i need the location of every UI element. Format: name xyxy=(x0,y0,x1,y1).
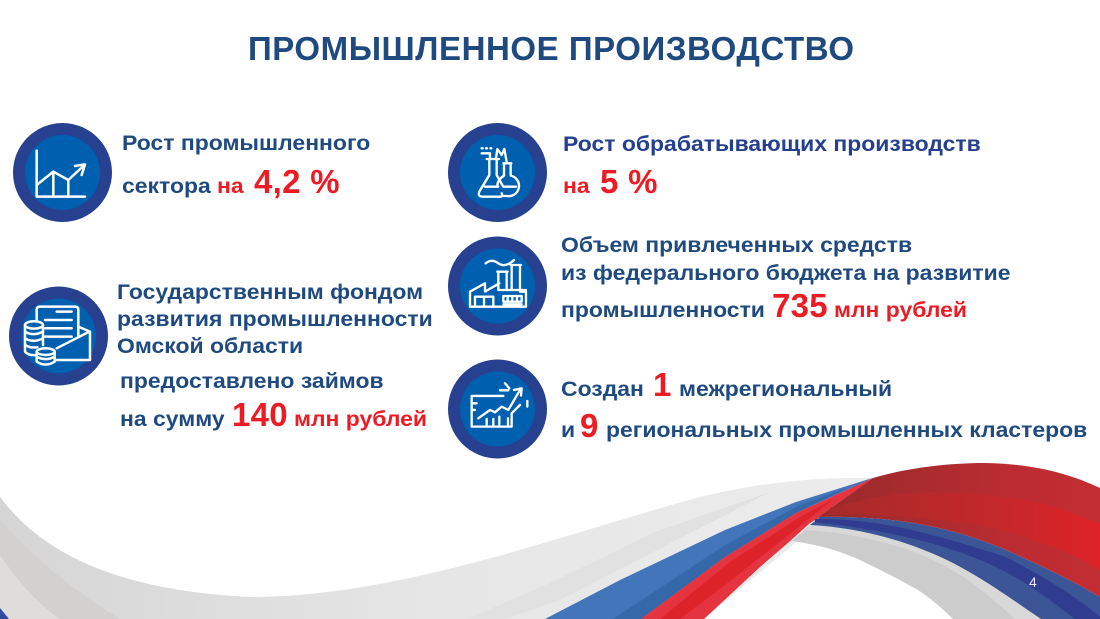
text: industrial growth xyxy=(122,131,370,200)
text: state fund loans xyxy=(117,280,433,433)
text: clusters: Создан xyxy=(561,377,644,401)
text: federal funds: промышленности xyxy=(561,298,765,322)
text: industrial growth: на xyxy=(217,174,244,198)
text: manufacturing growth xyxy=(563,132,981,200)
icon: rising chart xyxy=(448,360,547,458)
text: state fund loans: на сумму xyxy=(120,407,225,431)
text: industrial growth: 4,2 % xyxy=(254,163,340,200)
text: clusters xyxy=(561,366,1087,444)
text: manufacturing growth: Рост обрабатывающих производств xyxy=(563,132,981,156)
icon: flasks xyxy=(448,123,547,222)
ribbon: grey left band xyxy=(0,478,873,619)
page number: 4 xyxy=(1029,574,1037,590)
text: federal funds: 735 xyxy=(772,287,828,324)
ribbon: blue diagonal band xyxy=(545,478,873,619)
ribbon: red diagonal band xyxy=(641,478,873,619)
text: state fund loans: млн рублей xyxy=(294,407,427,431)
text: industrial growth: Рост промышленного xyxy=(122,131,370,155)
ribbon: left blue corner xyxy=(0,608,9,619)
text: state fund loans: Омской области xyxy=(117,334,303,358)
text: federal funds: из федерального бюджета на развитие xyxy=(561,261,1010,285)
text: clusters: региональных промышленных кластеров xyxy=(606,418,1087,442)
text: state fund loans: развития промышленности xyxy=(117,307,433,331)
text: federal funds: млн рублей xyxy=(834,298,967,322)
text: state fund loans: 140 xyxy=(232,396,288,433)
icon: documents and coins xyxy=(9,286,108,386)
text: manufacturing growth: на xyxy=(563,174,590,198)
text: clusters: 1 xyxy=(653,366,672,403)
ribbon: red arch xyxy=(810,463,1100,597)
ribbon: grey right band xyxy=(792,525,1041,619)
ribbon: blue right band xyxy=(810,517,1100,619)
text: clusters: и xyxy=(561,418,575,442)
text: federal funds xyxy=(561,233,1010,324)
ribbon background xyxy=(0,463,1100,619)
text: manufacturing growth: 5 % xyxy=(600,163,658,200)
text: industrial growth: сектора xyxy=(122,174,211,198)
text: clusters: 9 xyxy=(580,407,599,444)
text: state fund loans: предоставлено займов xyxy=(120,369,384,393)
title: ПРОМЫШЛЕННОЕ ПРОИЗВОДСТВО xyxy=(248,30,854,67)
icon: growth chart xyxy=(13,123,112,222)
text: state fund loans: Государственным фондом xyxy=(117,280,423,304)
text: federal funds: Объем привлеченных средств xyxy=(561,233,912,257)
icon: factory xyxy=(448,236,547,336)
text: clusters: межрегиональный xyxy=(679,377,892,401)
